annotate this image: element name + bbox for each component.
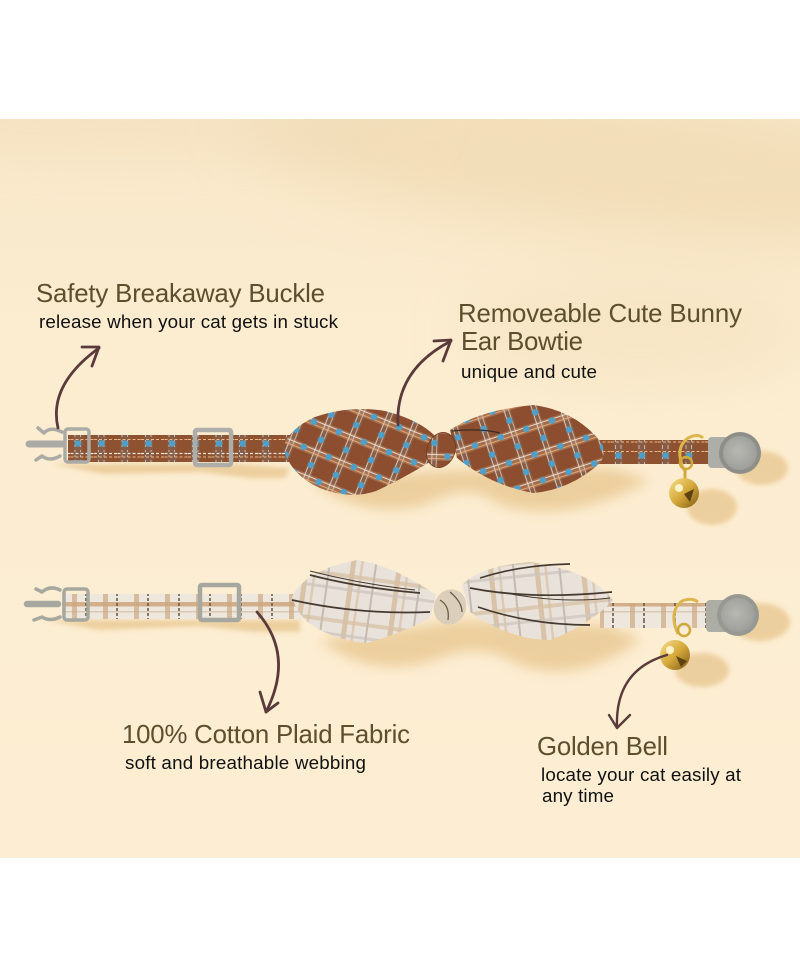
callout: removeable bowtie xyxy=(458,300,742,382)
callout: removeable bowtie: unique and cute xyxy=(461,361,597,382)
beige strap xyxy=(62,594,718,628)
brown bell xyxy=(669,436,703,508)
beige bow right wing xyxy=(462,562,613,640)
beige bow knot xyxy=(428,584,472,630)
callout: golden bell xyxy=(537,733,742,806)
arrow: to fabric xyxy=(257,612,279,712)
callout: safety breakaway buckle: release when your cat gets in stuck xyxy=(39,311,339,332)
brown bow left wing xyxy=(283,409,436,495)
brown clip xyxy=(708,432,761,474)
beige slider xyxy=(200,585,239,620)
arrow: to bowtie xyxy=(398,340,451,425)
brown bow knot xyxy=(422,428,460,472)
callout: removeable bowtie: Ear Bowtie xyxy=(461,328,583,356)
brown slider xyxy=(195,430,231,465)
brown bow right wing xyxy=(450,405,604,493)
callout: safety breakaway buckle: Safety Breakaway Buckle xyxy=(36,280,325,308)
callout: safety breakaway buckle xyxy=(36,280,339,332)
beige breakaway buckle xyxy=(27,588,88,620)
arrow: to bell xyxy=(609,655,667,728)
callout: cotton plaid fabric xyxy=(122,721,410,773)
beige bell xyxy=(660,599,698,670)
arrow: to buckle xyxy=(56,347,99,428)
beige clip xyxy=(706,594,759,636)
beige bow left wing xyxy=(292,560,436,643)
collar: beige plaid xyxy=(27,560,759,670)
brown breakaway buckle xyxy=(29,428,89,462)
brown strap xyxy=(68,435,718,464)
callout: cotton plaid fabric: 100% Cotton Plaid Fabric xyxy=(122,721,410,749)
callout: golden bell: Golden Bell xyxy=(537,733,668,761)
callout: golden bell: any time xyxy=(542,785,614,806)
collar: brown plaid xyxy=(29,405,761,508)
callout: golden bell: locate your cat easily at xyxy=(541,764,742,785)
callout: cotton plaid fabric: soft and breathable webbing xyxy=(125,752,366,773)
callout: removeable bowtie: Removeable Cute Bunny xyxy=(458,300,742,328)
collar shadows xyxy=(45,451,790,687)
